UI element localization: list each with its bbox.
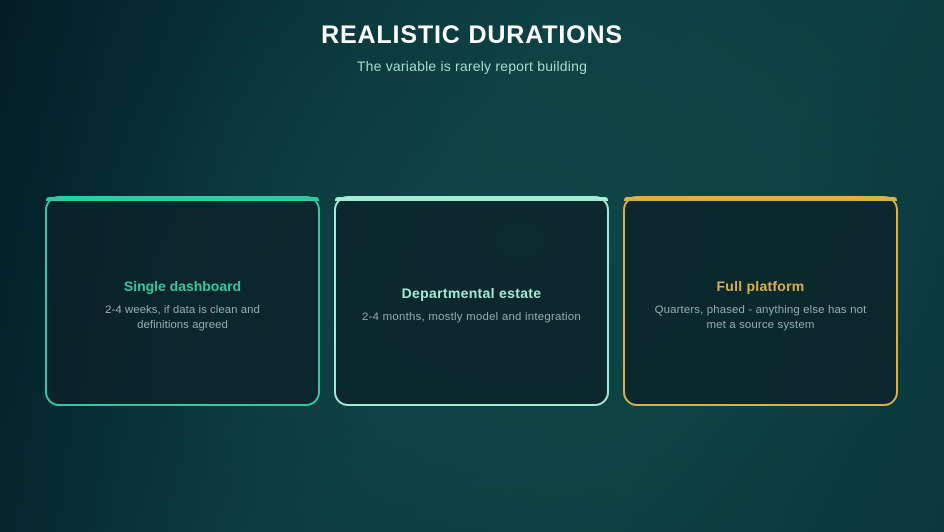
description: single dashboard	[105, 304, 260, 331]
panel: single dashboard	[45, 196, 320, 406]
heading: full platform: Full platform	[716, 278, 805, 294]
description: single dashboard: definitions agreed	[137, 319, 228, 331]
description: full platform	[655, 304, 866, 331]
description: full platform: Quarters, phased - anything else has not	[655, 304, 866, 316]
text: full platform	[655, 278, 866, 331]
accent bar: single dashboard	[46, 197, 319, 201]
subtitle: The variable is rarely report building	[357, 58, 587, 74]
accent bar: departmental estate	[335, 197, 608, 201]
heading: departmental estate: Departmental estate	[402, 285, 541, 301]
heading: single dashboard: Single dashboard	[124, 278, 241, 294]
description: single dashboard: 2-4 weeks, if data is clean and	[105, 304, 260, 316]
description: full platform: met a source system	[707, 319, 814, 331]
text: single dashboard	[105, 278, 260, 331]
description: departmental estate: 2-4 months, mostly model and integration	[362, 311, 581, 323]
panel: full platform	[623, 196, 898, 406]
panel: departmental estate	[334, 196, 609, 406]
accent bar: full platform	[624, 197, 897, 201]
text: departmental estate	[362, 285, 581, 323]
title: REALISTIC DURATIONS	[321, 21, 623, 49]
